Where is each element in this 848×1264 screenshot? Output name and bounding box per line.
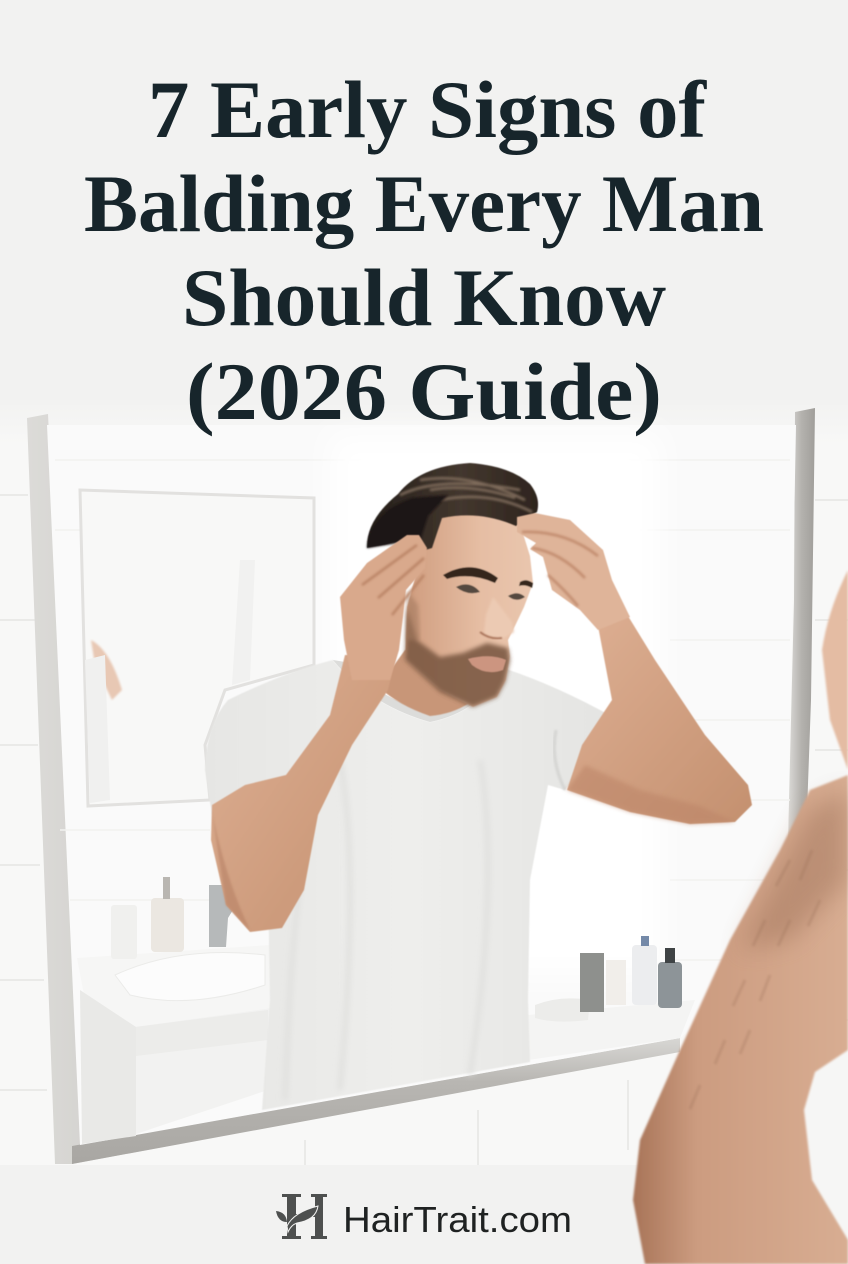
footer band <box>0 1165 848 1264</box>
arm shadow <box>740 790 848 950</box>
icon: H with leaf <box>276 1194 327 1239</box>
lips <box>468 656 506 672</box>
right arm <box>567 616 752 824</box>
mirror glass <box>47 425 796 1145</box>
wordmark: HairTrait.com <box>343 1199 572 1240</box>
vanity sink cabinet <box>77 945 272 1144</box>
cheek stubble <box>406 590 420 640</box>
counter right with bottles <box>528 936 695 1060</box>
title line 4: (2026 Guide) <box>186 346 662 437</box>
logo <box>276 1194 572 1240</box>
title line 3: Should Know <box>182 252 666 343</box>
left arm <box>211 655 396 932</box>
face <box>405 505 533 707</box>
arm hair texture <box>690 850 820 1109</box>
right hand in hair <box>517 513 630 630</box>
neck <box>376 650 500 716</box>
soft fade from background into wall <box>0 400 848 445</box>
foreground arm and shoulder <box>633 570 848 1264</box>
eyebrows <box>443 567 533 588</box>
foreground shirt at right <box>804 1050 848 1240</box>
reflected back mirror <box>80 490 314 806</box>
left hand on temple <box>340 535 427 680</box>
title line 1: 7 Early Signs of <box>148 64 708 155</box>
white t-shirt <box>205 660 611 1110</box>
man in mirror <box>205 463 752 1110</box>
glare behind man <box>330 435 660 975</box>
beard <box>405 607 510 707</box>
faucet and toiletries left <box>111 877 236 959</box>
mirror <box>27 408 815 1164</box>
title <box>84 64 764 437</box>
nose <box>484 597 514 640</box>
title line 2: Balding Every Man <box>84 158 764 249</box>
hair <box>367 463 538 552</box>
eyes <box>456 584 525 600</box>
mirror frame <box>27 408 815 1164</box>
bathroom tile wall <box>0 405 848 1165</box>
reflected tile lines <box>55 460 790 960</box>
